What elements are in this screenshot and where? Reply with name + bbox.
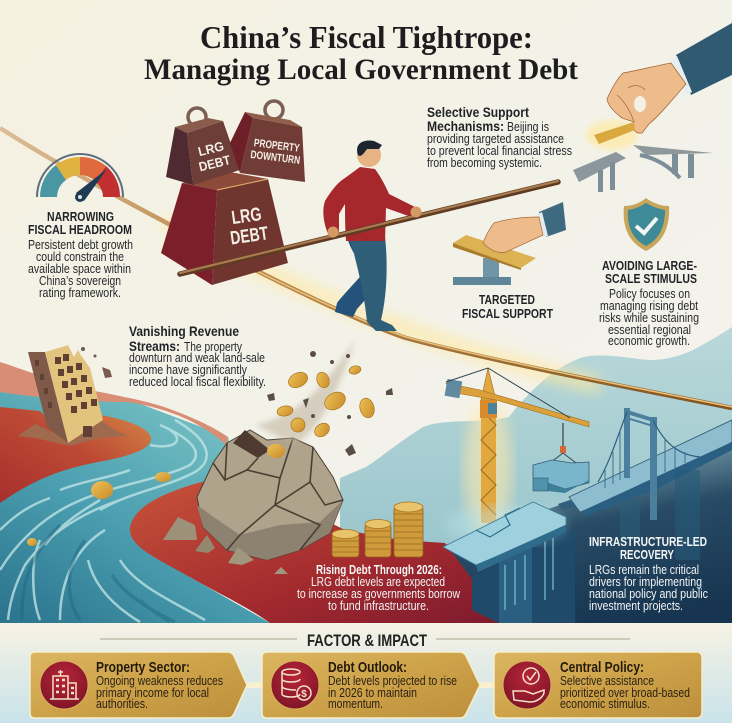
label: large weight: DEBT: [229, 223, 270, 249]
icon: puzzle deck and towers: [443, 500, 576, 623]
panel: debt outlook: Debt Outlook:: [328, 659, 407, 676]
text: selective support: [427, 104, 572, 170]
connectors between cards: [245, 682, 498, 688]
text: selective support: Selective Support: [427, 104, 529, 120]
text: rising debt through 2026: Rising Debt Through 2026:: [316, 562, 442, 577]
rope with glow: [0, 128, 732, 408]
text: infrastructure-led recovery: [589, 534, 708, 613]
panel: debt outlook: in 2026 to maintain: [328, 685, 417, 700]
text: avoiding large-scale stimulus: managing rising debt: [600, 299, 698, 313]
text: selective support: providing targeted assistance: [427, 132, 564, 146]
text: vanishing revenue streams: reduced local fiscal flexibility.: [129, 375, 266, 389]
panel: central policy: economic stimulus.: [560, 696, 650, 711]
panel: debt outlook: momentum.: [328, 696, 383, 711]
icon: office building: [40, 661, 88, 709]
panel: debt outlook: Debt levels projected to rise: [328, 673, 457, 688]
icon: hand placing plank on support: [453, 202, 566, 285]
title: [144, 19, 578, 86]
icon: hand with check: [503, 661, 551, 709]
panel: central policy: [494, 652, 702, 718]
text: vanishing revenue streams: Streams:: [129, 338, 180, 354]
panel: central policy: prioritized over broad-based: [560, 685, 690, 700]
icon: hand placing gold bar over broken bridge: [573, 23, 732, 192]
text: targeted fiscal support: TARGETED: [479, 292, 535, 307]
text: avoiding large-scale stimulus: AVOIDING LARGE-: [602, 258, 697, 273]
text: infrastructure-led recovery: national policy and public: [589, 587, 708, 601]
label: top-left weight: [194, 138, 232, 174]
text: vanishing revenue streams: downturn and weak land-sale: [129, 351, 265, 365]
lower red bank: [130, 478, 505, 623]
panel: property sector: [30, 652, 247, 718]
label: top-left weight: DEBT: [197, 152, 232, 174]
text: narrowing fiscal headroom: available space within: [28, 262, 131, 276]
icon: coins with dollar: [271, 661, 319, 709]
text: narrowing fiscal headroom: rating framework.: [39, 286, 121, 300]
panel: property sector: authorities.: [96, 696, 148, 711]
text: narrowing fiscal headroom: [28, 209, 133, 300]
title: Managing Local Government Debt: [144, 53, 578, 86]
text: rising debt through 2026: LRG debt levels are expected: [311, 575, 445, 589]
near bank under building: [0, 407, 151, 503]
panel: property sector: Property Sector:: [96, 659, 190, 676]
river with waves: [0, 390, 270, 623]
label: property weight: DOWNTURN: [250, 149, 301, 167]
text: avoiding large-scale stimulus: risks while sustaining: [599, 311, 699, 325]
text: targeted fiscal support: FISCAL SUPPORT: [462, 306, 553, 321]
text: avoiding large-scale stimulus: SCALE STIMULUS: [605, 271, 697, 286]
text: selective support: to prevent local financial stress: [427, 144, 572, 158]
title: China’s Fiscal Tightrope:: [200, 19, 533, 55]
icon: coins with dollar: $: [301, 689, 307, 700]
icon: fiscal gauge: [37, 154, 123, 202]
text: targeted fiscal support: [462, 292, 553, 321]
icon: hanging block: [533, 453, 589, 493]
text: narrowing fiscal headroom: NARROWING: [47, 209, 114, 224]
heading: factor and impact: FACTOR & IMPACT: [307, 631, 427, 650]
text: narrowing fiscal headroom: Persistent debt growth: [28, 238, 133, 252]
text: selective support: from becoming systemic.: [427, 156, 542, 170]
panel: central policy: Central Policy:: [560, 659, 644, 676]
balance pole: [180, 181, 558, 274]
text: selective support: Mechanisms:: [427, 118, 504, 134]
icon: shield with check: [624, 198, 669, 251]
text: avoiding large-scale stimulus: essential regional: [608, 323, 691, 337]
text: narrowing fiscal headroom: China’s sovereign: [39, 274, 121, 288]
text: rising debt through 2026: [297, 562, 461, 613]
panel: property sector: primary income for local: [96, 685, 209, 700]
text: infrastructure-led recovery: LRGs remain the critical: [589, 563, 699, 577]
text: rising debt through 2026: to fund infrastructure.: [328, 599, 429, 613]
icon: construction crane: [445, 368, 589, 540]
icon: floating coins in river: [27, 472, 171, 546]
panel: central policy: Selective assistance: [560, 673, 654, 688]
text: infrastructure-led recovery: RECOVERY: [620, 547, 674, 562]
panel: debt outlook: [262, 652, 480, 718]
label: property weight: [250, 137, 302, 167]
label: large weight: LRG: [230, 204, 263, 229]
label: large weight: [226, 204, 270, 249]
text: narrowing fiscal headroom: FISCAL HEADROOM: [28, 222, 132, 237]
icon: suspension bridge: [569, 408, 732, 560]
text: vanishing revenue streams: income have significantly: [129, 363, 248, 377]
text: narrowing fiscal headroom: could constrain the: [36, 250, 124, 264]
text: rising debt through 2026: to increase as governments borrow: [297, 587, 461, 601]
text: infrastructure-led recovery: investment projects.: [589, 599, 683, 613]
text: infrastructure-led recovery: drivers for implementing: [589, 575, 702, 589]
tightrope walker: [323, 141, 417, 331]
icon: coin stacks: [332, 502, 423, 557]
bottom factor band background: [0, 623, 732, 723]
text: avoiding large-scale stimulus: [599, 258, 699, 348]
label: top-left weight: LRG: [197, 138, 225, 159]
text: selective support: Beijing is: [507, 120, 549, 134]
icon: flying coins and debris: [255, 340, 393, 456]
text: avoiding large-scale stimulus: Policy focuses on: [609, 287, 690, 301]
text: avoiding large-scale stimulus: economic growth.: [608, 334, 690, 348]
salmon far river bank: [0, 362, 228, 445]
text: vanishing revenue streams: [129, 323, 266, 389]
text: vanishing revenue streams: The property: [184, 340, 243, 354]
icon: cracked boulder: [163, 430, 343, 574]
panel: property sector: Ongoing weakness reduces: [96, 673, 223, 688]
weights stack: [161, 101, 305, 285]
label: property weight: PROPERTY: [253, 137, 301, 155]
background hills: [340, 327, 732, 623]
icon: crumbling building: [18, 343, 128, 446]
text: vanishing revenue streams: Vanishing Revenue: [129, 323, 239, 339]
